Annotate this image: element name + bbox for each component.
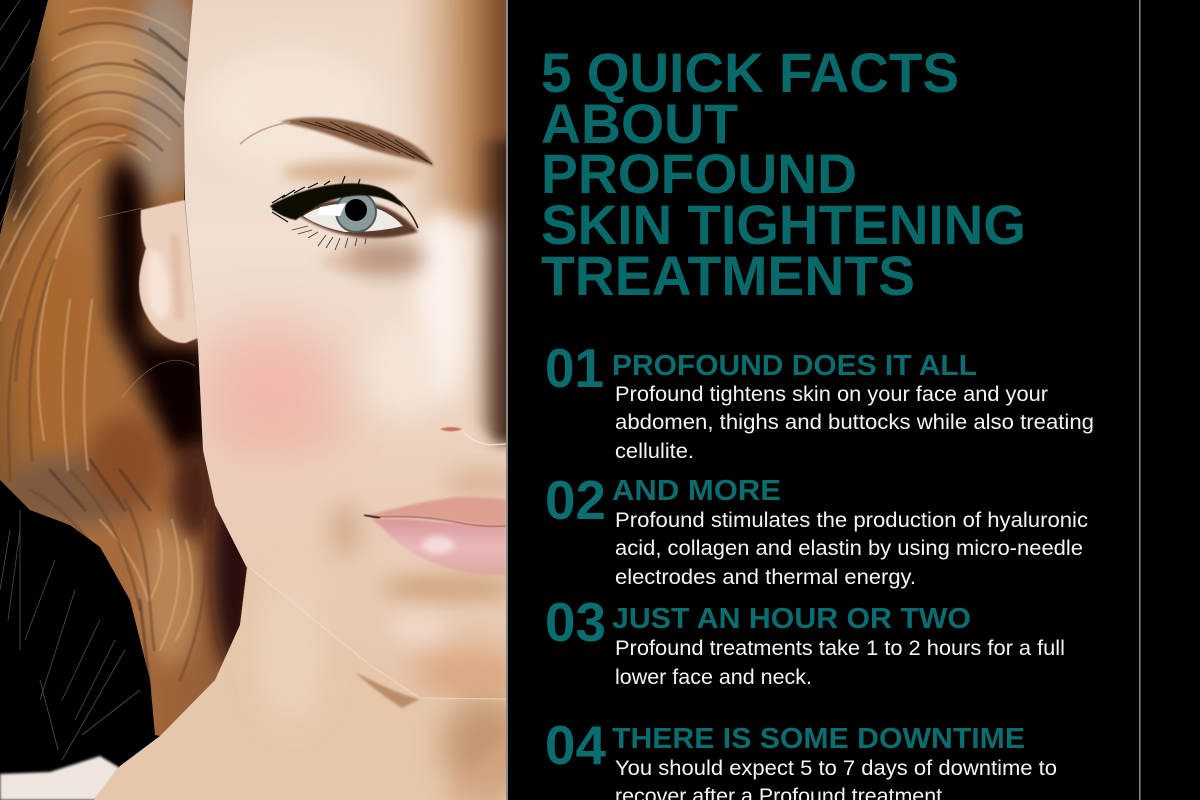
heading 04: THERE IS SOME DOWNTIME bbox=[612, 723, 1025, 755]
eyebrow bbox=[240, 117, 434, 166]
fact 02 bbox=[545, 469, 1088, 589]
warm mid lengths bbox=[10, 230, 100, 470]
number 03: 03 bbox=[545, 591, 606, 653]
lower lashes bbox=[292, 226, 366, 250]
body 03: Profound treatments take 1 to 2 hours for a full bbox=[615, 636, 1065, 660]
upper lashes bbox=[270, 183, 404, 220]
body 03: lower face and neck. bbox=[615, 665, 812, 689]
heading 03: JUST AN HOUR OR TWO bbox=[612, 603, 971, 635]
heading 01: PROFOUND DOES IT ALL bbox=[612, 350, 977, 382]
skin bbox=[90, 0, 530, 800]
body 02 bbox=[615, 508, 1088, 589]
under eye shadow bbox=[345, 240, 425, 276]
flyaway strands bbox=[0, 0, 195, 760]
dark outer edge bbox=[0, 0, 40, 220]
panel rules bbox=[506, 0, 1140, 800]
cheek blush bbox=[200, 325, 340, 445]
neck bbox=[94, 566, 527, 800]
body 02: Profound stimulates the production of hyaluronic bbox=[615, 508, 1088, 532]
number 02: 02 bbox=[545, 469, 606, 531]
body 04: You should expect 5 to 7 days of downtime to bbox=[615, 756, 1057, 780]
hair strands bbox=[0, 8, 206, 690]
mid cheek highlight bbox=[362, 326, 434, 422]
fact 03 bbox=[545, 591, 1065, 689]
nostril bbox=[440, 427, 462, 431]
title: TREATMENTS bbox=[541, 244, 915, 307]
title: ABOUT bbox=[541, 92, 738, 155]
mouth shading bbox=[380, 576, 520, 600]
fact 04 bbox=[545, 714, 1057, 800]
eyelid crease bbox=[282, 161, 418, 183]
lips bbox=[364, 497, 506, 575]
lower hair colours bbox=[5, 454, 145, 526]
portrait photo: half face bbox=[0, 0, 530, 800]
title bbox=[541, 41, 1026, 307]
temple shading toward centre bbox=[405, 0, 520, 220]
ear bbox=[139, 200, 198, 343]
body 02: electrodes and thermal energy. bbox=[615, 565, 916, 589]
nose highlight bbox=[418, 210, 466, 400]
body 01: cellulite. bbox=[615, 439, 694, 463]
shirt bbox=[0, 756, 120, 800]
dark behind ear bbox=[106, 155, 212, 455]
eye bbox=[270, 176, 418, 250]
body 01: Profound tightens skin on your face and your bbox=[615, 382, 1048, 406]
hair bbox=[0, 0, 259, 740]
number 04: 04 bbox=[545, 714, 606, 776]
body 01: abdomen, thighs and buttocks while also treating bbox=[615, 410, 1094, 434]
title: PROFOUND bbox=[541, 142, 857, 205]
heading 02: AND MORE bbox=[612, 475, 781, 507]
body 02: acid, collagen and elastin by using micro-needle bbox=[615, 536, 1083, 560]
body 01 bbox=[615, 382, 1094, 463]
fact 01 bbox=[545, 337, 1094, 463]
title: SKIN TIGHTENING bbox=[541, 193, 1026, 256]
body 03 bbox=[615, 636, 1065, 689]
title: 5 QUICK FACTS bbox=[541, 41, 959, 104]
greyer hairline bbox=[125, 0, 193, 146]
forehead highlight bbox=[206, 50, 374, 160]
side of nose shadow bbox=[470, 133, 506, 454]
number 01: 01 bbox=[545, 337, 604, 399]
chin colour bbox=[410, 648, 530, 696]
body 04 bbox=[615, 756, 1057, 800]
